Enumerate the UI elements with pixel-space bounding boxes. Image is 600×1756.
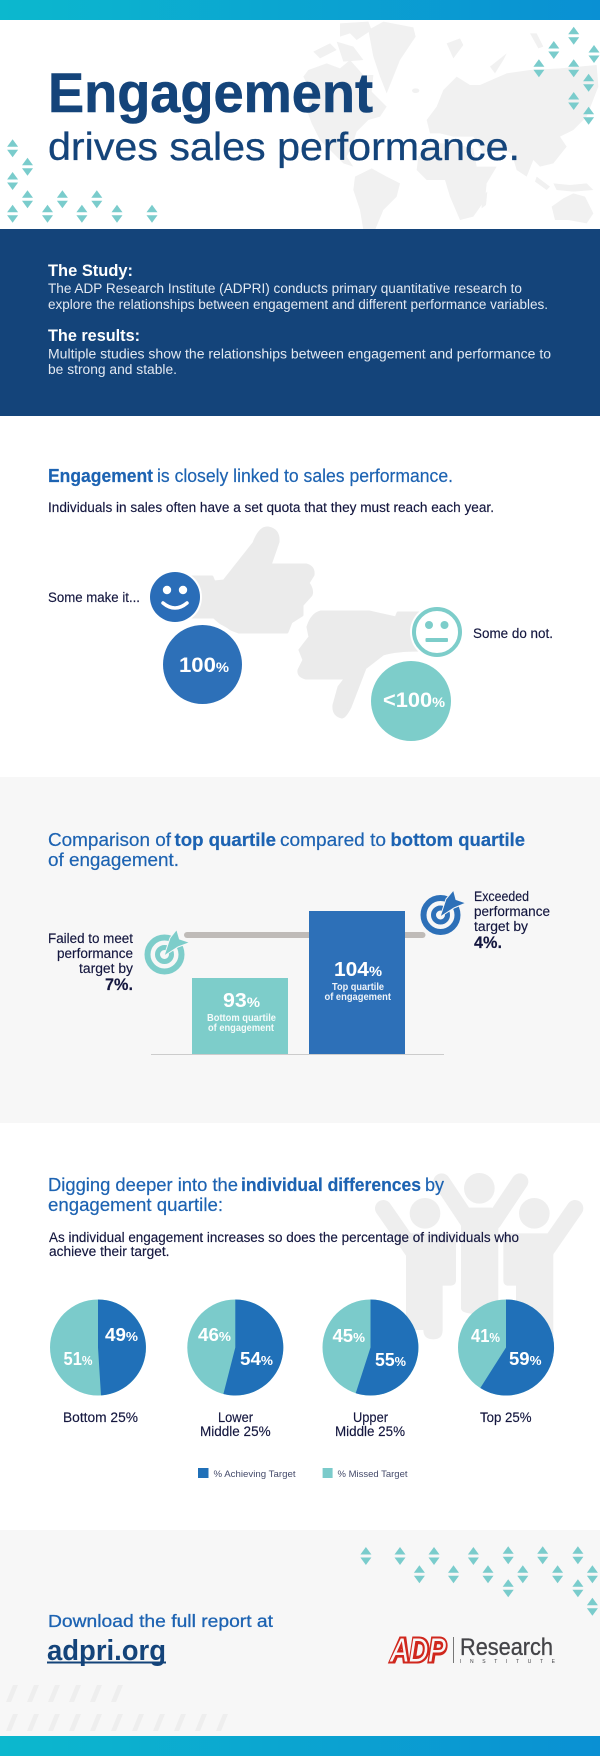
panel: footer — [0, 1530, 600, 1736]
logo: ADP Research Institute: INSTITUTE — [460, 1659, 556, 1665]
text: study description: The ADP Research Institute (ADPRI) conducts primary quantitative research to — [48, 281, 522, 296]
heading: the study: The Study: — [48, 261, 133, 280]
decoration: triangles top right — [533, 27, 600, 125]
title: drives sales performance. — [48, 126, 520, 169]
text: failed to meet target: target by — [79, 961, 133, 976]
heading: individual differences: by — [425, 1174, 445, 1195]
text: results description — [48, 346, 551, 377]
label: some do not: Some do not. — [473, 626, 553, 641]
logo: ADP Research Institute: Research — [460, 1634, 553, 1661]
text: exceeded target: performance — [474, 904, 550, 919]
heading: engagement linked to sales: Engagement — [48, 465, 153, 486]
bottom gradient bar — [0, 1736, 600, 1756]
icon: cheering people — [383, 1173, 575, 1345]
text: exceeded target: 4%. — [474, 933, 502, 952]
text: download call to action: Download the full report at — [48, 1611, 273, 1631]
legend — [198, 1468, 408, 1480]
heading: individual differences: engagement quartile: — [48, 1194, 223, 1215]
callout: under 100 percent — [367, 657, 455, 745]
pie chart: top 25% — [458, 1300, 554, 1396]
text: individual engagement intro — [49, 1230, 519, 1259]
pie labels: Top 25% — [480, 1410, 532, 1425]
title: Engagement — [48, 61, 373, 124]
heading: engagement linked to sales: is closely linked to sales performance. — [157, 465, 453, 486]
pie chart: lower middle 25% — [187, 1300, 283, 1396]
heading: comparison: compared to — [280, 829, 386, 850]
icon: thumbs up — [191, 528, 313, 632]
text: failed to meet target: Failed to meet — [48, 931, 133, 946]
text: failed to meet target: performance — [57, 946, 133, 961]
bar: bottom quartile — [192, 978, 288, 1054]
target line — [184, 932, 426, 938]
pie chart: upper middle 25%: 45% — [332, 1326, 365, 1346]
callout: 100 percent — [158, 620, 246, 708]
bar: bottom quartile: Bottom quartile — [207, 1013, 276, 1024]
pie chart: bottom 25%: 49% — [105, 1325, 138, 1345]
logo: ADP Research Institute: ADP — [389, 1632, 446, 1668]
icon: thumbs down — [299, 612, 421, 717]
pie chart: top 25%: 59% — [509, 1349, 542, 1369]
pie chart: lower middle 25%: 46% — [198, 1325, 231, 1345]
panel: study and results — [0, 229, 600, 416]
pie chart: upper middle 25% — [322, 1300, 418, 1396]
pie labels: Upper — [353, 1410, 388, 1425]
top gradient bar — [0, 0, 600, 20]
pie labels: Middle 25% — [335, 1424, 405, 1439]
bar: top quartile: of engagement — [324, 992, 392, 1003]
text: failed to meet target: 7%. — [105, 975, 133, 994]
decoration: triangles left — [7, 139, 157, 223]
heading: comparison: of engagement. — [48, 849, 179, 870]
heading: comparison — [48, 829, 525, 870]
icon: teal target — [148, 930, 190, 972]
text: exceeded target: target by — [474, 919, 528, 934]
label: some make it: Some make it... — [48, 590, 140, 605]
legend: % Achieving Target — [214, 1469, 296, 1480]
text: results description: Multiple studies show the relationships between engagement and performance to — [48, 346, 551, 362]
bar: top quartile: Top quartile — [332, 982, 384, 993]
link text: adpri.org: adpri.org — [47, 1635, 166, 1667]
text: individual engagement intro: As individual engagement increases so does the percentage of individuals who — [49, 1230, 519, 1245]
text: exceeded target: Exceeded — [474, 889, 529, 904]
text: exceeded target — [474, 889, 550, 952]
text: failed to meet target — [48, 931, 133, 994]
text: study description — [48, 281, 548, 312]
pie labels — [63, 1410, 532, 1439]
icon: smiling face — [148, 570, 202, 624]
text: study description: explore the relationships between engagement and different performance variables. — [48, 297, 548, 312]
icon: neutral face — [410, 605, 464, 659]
callout: under 100 percent: <100% — [383, 689, 446, 712]
heading: comparison: top quartile — [174, 829, 276, 850]
bar: top quartile: 104% — [334, 959, 383, 981]
world map background — [303, 22, 598, 230]
pie chart: bottom 25%: 51% — [64, 1349, 93, 1369]
heading: the results: The results: — [48, 326, 140, 345]
callout: 100 percent: 100% — [179, 654, 230, 677]
pie labels: Lower — [218, 1410, 253, 1425]
pie chart: upper middle 25%: 55% — [375, 1350, 406, 1370]
heading: individual differences: individual differences — [241, 1174, 421, 1195]
title — [48, 61, 520, 169]
heading: comparison: bottom quartile — [390, 829, 525, 850]
logo: ADP Research Institute: ADP — [390, 1632, 447, 1668]
text: individual engagement intro: achieve their target. — [49, 1244, 170, 1259]
bar chart baseline — [151, 1054, 444, 1055]
pie chart: lower middle 25%: 54% — [240, 1349, 273, 1369]
panel: quartile comparison — [0, 777, 600, 1123]
heading: individual differences: Digging deeper into the — [48, 1174, 238, 1195]
decoration: footer triangles — [360, 1546, 598, 1616]
legend: % Missed Target — [338, 1469, 408, 1480]
text: quota intro: Individuals in sales often have a set quota that they must reach each year. — [48, 500, 494, 515]
bar: bottom quartile: 93% — [223, 990, 261, 1012]
bar: top quartile — [309, 911, 405, 1054]
pie chart: bottom 25% — [50, 1300, 146, 1396]
bar: bottom quartile: of engagement — [208, 1023, 275, 1034]
pie chart: top 25%: 41% — [471, 1326, 500, 1346]
logo: ADP Research Institute — [389, 1632, 556, 1668]
pie labels: Bottom 25% — [63, 1410, 138, 1425]
heading: individual differences — [48, 1174, 445, 1215]
heading: comparison: Comparison of — [48, 829, 172, 850]
icon: blue target — [424, 890, 466, 932]
decoration: diagonal slashes — [6, 1685, 228, 1731]
text: results description: be strong and stable. — [48, 362, 177, 377]
pie labels: Middle 25% — [200, 1424, 271, 1439]
